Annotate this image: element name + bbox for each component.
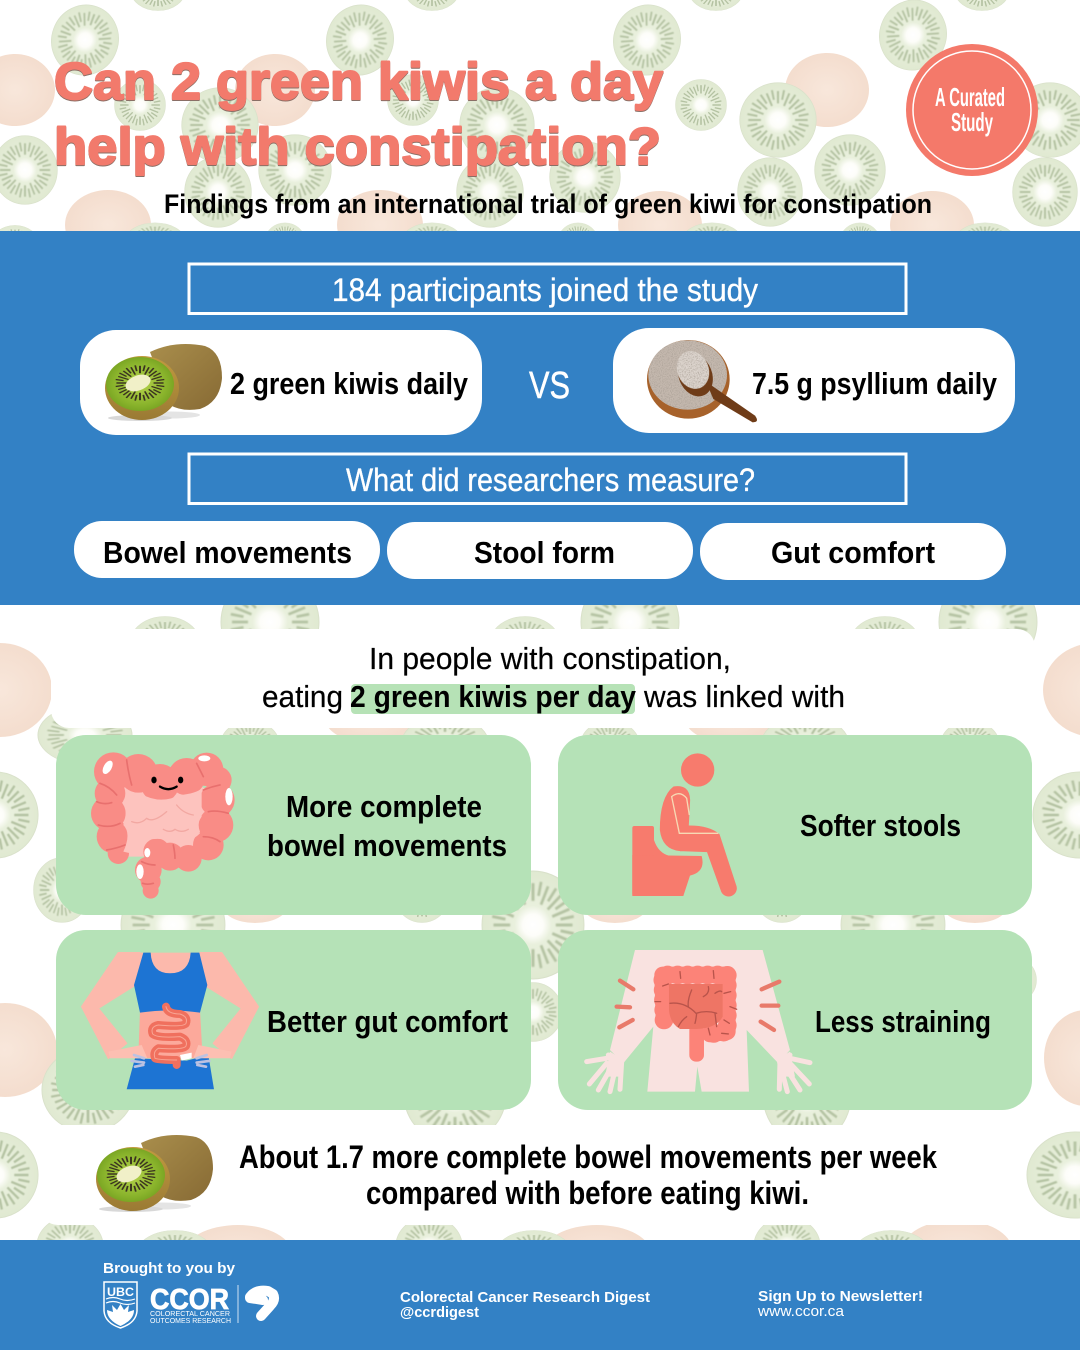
panel: more complete bowel movements: bowel movements	[267, 828, 507, 863]
newsletter link	[757, 1288, 923, 1320]
subtitle: Findings from an international trial of green kiwi for constipation	[164, 189, 932, 219]
pill: Gut comfort: Gut comfort	[771, 535, 935, 570]
pill: Stool form	[387, 522, 693, 579]
panel: key result: compared with before eating kiwi.	[366, 1175, 809, 1211]
panel: more complete bowel movements	[56, 735, 531, 915]
panel: study design	[0, 231, 1080, 605]
logo: colon mark	[250, 1291, 274, 1316]
box: measurement question	[189, 454, 906, 504]
panel: better gut comfort	[56, 930, 531, 1110]
title	[54, 53, 663, 176]
panel: softer stools: Softer stools	[800, 808, 961, 843]
box: participants	[189, 264, 906, 314]
title: Can 2 green kiwis a day	[54, 53, 663, 111]
footer	[0, 1240, 1080, 1350]
icon: body with inflamed intestine	[587, 950, 810, 1092]
logo: CCOR: CCOR	[150, 1284, 229, 1316]
newsletter link: www.ccor.ca	[757, 1303, 845, 1320]
panel: less straining: Less straining	[815, 1004, 991, 1039]
pill: Stool form: Stool form	[474, 535, 615, 570]
intro text panel: In people with constipation,	[369, 641, 731, 676]
badge: A Curated Study: A Curated	[935, 82, 1005, 112]
icon: person on toilet	[632, 753, 737, 897]
panel: key result: About 1.7 more complete bowel movements per week	[239, 1139, 937, 1175]
intro text panel	[51, 629, 1035, 728]
newsletter link: Sign Up to Newsletter!	[758, 1288, 923, 1305]
pill: 7.5 g psyllium daily	[613, 328, 1015, 433]
kiwi pattern: header	[0, 0, 1080, 265]
digest credit: Colorectal Cancer Research Digest	[400, 1289, 650, 1306]
title: help with constipation?	[54, 118, 661, 176]
intro text panel: was linked with	[643, 679, 845, 714]
panel: less straining	[558, 930, 1032, 1110]
box: participants: 184 participants joined the study	[332, 272, 758, 308]
intro text panel: eating	[262, 679, 343, 714]
box: measurement question: What did researchers measure?	[346, 462, 755, 498]
icon: smiling colon	[91, 752, 235, 899]
logo: CCOR: OUTCOMES RESEARCH	[150, 1316, 231, 1325]
logo: UBC shield	[104, 1282, 137, 1328]
digest credit: @ccrdigest	[400, 1304, 479, 1321]
panel: key result	[40, 1125, 1026, 1225]
panel: softer stools	[558, 735, 1032, 915]
panel: better gut comfort: Better gut comfort	[267, 1004, 508, 1039]
footer credit: Brought to you by	[103, 1260, 236, 1277]
intro text panel: 2 green kiwis per day	[350, 679, 637, 714]
logo: CCOR: COLORECTAL CANCER	[150, 1309, 231, 1318]
pill: 2 green kiwis daily: 2 green kiwis daily	[230, 366, 469, 401]
pill: Gut comfort	[700, 523, 1006, 580]
icon: torso with intestine	[82, 953, 258, 1089]
pill: 7.5 g psyllium daily: 7.5 g psyllium daily	[752, 366, 998, 401]
badge: A Curated Study	[906, 44, 1038, 176]
kiwi pattern: lower section	[0, 573, 1080, 1285]
panel: more complete bowel movements: More complete	[286, 789, 482, 824]
badge: A Curated Study: Study	[951, 107, 993, 137]
digest credit	[400, 1289, 650, 1321]
pill: Bowel movements	[74, 521, 380, 578]
VS label: VS	[529, 365, 570, 407]
icon: kiwi fruit	[96, 1135, 213, 1212]
icon: psyllium bowl	[647, 340, 757, 422]
pill: 2 green kiwis daily	[80, 330, 482, 435]
pill: Bowel movements: Bowel movements	[103, 535, 352, 570]
logo: UBC shield: UBC	[107, 1285, 134, 1299]
